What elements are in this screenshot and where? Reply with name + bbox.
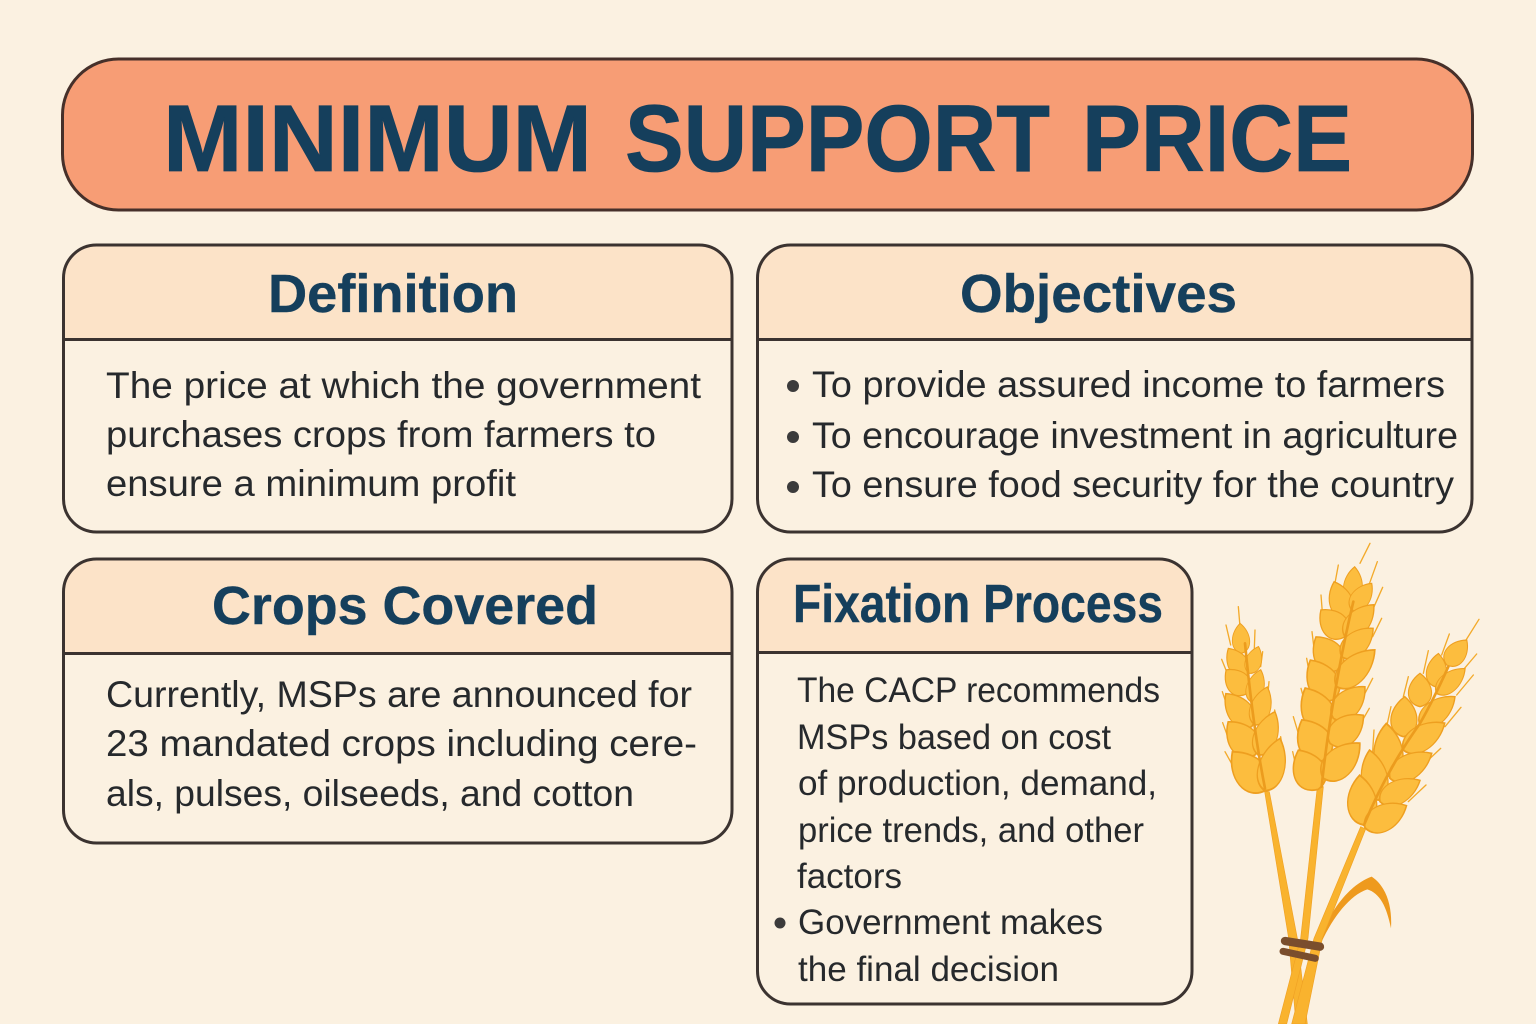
objectives list: To provide assured income to farmers bbox=[812, 364, 1445, 405]
crops text: als, pulses, oilseeds, and cotton bbox=[106, 773, 634, 814]
title: MINIMUM bbox=[163, 86, 592, 192]
definition text: purchases crops from farmers to bbox=[106, 414, 656, 455]
panel: definition bbox=[63, 245, 732, 532]
title: PRICE bbox=[1082, 86, 1352, 192]
fixation text: price trends, and other bbox=[798, 811, 1144, 850]
fixation text: of production, demand, bbox=[798, 764, 1157, 803]
definition text: The price at which the government bbox=[106, 365, 702, 406]
crops text: 23 mandated crops including cere- bbox=[106, 723, 697, 764]
fixation text: factors bbox=[797, 857, 902, 896]
panel: crops covered bbox=[63, 559, 732, 843]
objectives list: To encourage investment in agriculture bbox=[812, 415, 1458, 456]
heading: objectives: Objectives bbox=[960, 264, 1237, 324]
definition text bbox=[106, 365, 702, 504]
title banner bbox=[62, 59, 1472, 210]
fixation text bbox=[774, 671, 1160, 989]
heading: definition: Definition bbox=[268, 264, 518, 324]
crops text: Currently, MSPs are announced for bbox=[106, 674, 692, 715]
fixation text: the final decision bbox=[798, 950, 1059, 989]
crops text bbox=[106, 674, 697, 814]
fixation text: The CACP recommends bbox=[797, 671, 1160, 710]
fixation text: MSPs based on cost bbox=[797, 718, 1111, 757]
definition text: ensure a minimum profit bbox=[106, 463, 517, 504]
objectives list bbox=[787, 364, 1458, 505]
objectives list: To ensure food security for the country bbox=[812, 464, 1455, 505]
panel: objectives bbox=[757, 245, 1472, 532]
fixation text: Government makes bbox=[798, 903, 1103, 942]
heading: crops covered: Crops Covered bbox=[212, 576, 598, 636]
heading: fixation process: Fixation Process bbox=[793, 574, 1163, 634]
title: SUPPORT bbox=[625, 86, 1050, 192]
icon: wheat bundle bbox=[1216, 543, 1479, 1024]
panel: fixation process bbox=[757, 559, 1192, 1004]
